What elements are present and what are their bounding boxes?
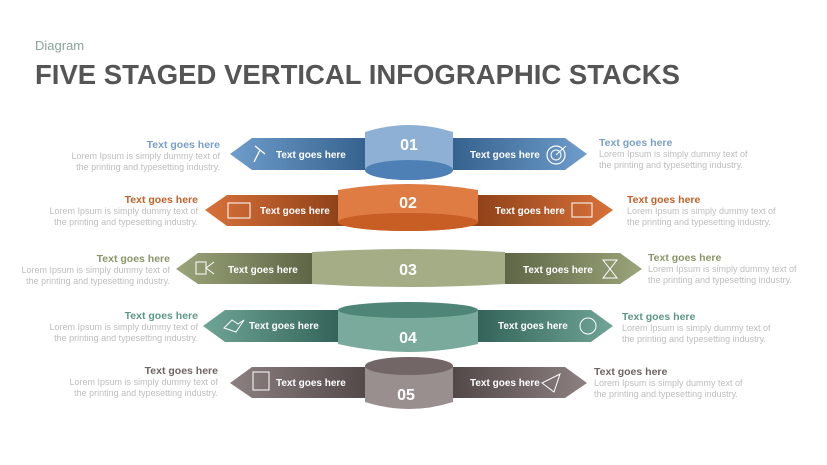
stage 5: Text goes here [470,378,540,389]
side text 1: the printing and typesetting industry. [76,162,220,172]
side text 2: Lorem Ipsum is simply dummy text of [627,206,776,216]
stage 5: Text goes here [276,378,346,389]
stage 3: 03 [399,262,417,279]
stage 2: 02 [399,195,417,212]
side text 1: Lorem Ipsum is simply dummy text of [599,149,748,159]
side text 1: Lorem Ipsum is simply dummy text of [71,151,220,161]
stage 4: 04 [399,330,417,347]
side text 5: the printing and typesetting industry. [74,388,218,398]
side text 1 [71,137,748,172]
side text 2: the printing and typesetting industry. [627,217,771,227]
side text 5: Text goes here [594,366,667,378]
stage 3: Text goes here [523,265,593,276]
side text 5: the printing and typesetting industry. [594,389,738,399]
side text 1: Text goes here [147,139,220,151]
stage 2: Text goes here [495,206,565,217]
side text 5: Lorem Ipsum is simply dummy text of [594,378,743,388]
stage 4: Text goes here [498,321,568,332]
side text 2: Lorem Ipsum is simply dummy text of [49,206,198,216]
stage 5: 05 [397,387,415,404]
side text 2: Text goes here [627,194,700,206]
side text 4: Lorem Ipsum is simply dummy text of [49,322,198,332]
side text 4: the printing and typesetting industry. [54,333,198,343]
side text 4: the printing and typesetting industry. [622,334,766,344]
side text 1: the printing and typesetting industry. [599,160,743,170]
side text 1: Text goes here [599,137,672,149]
side text 3 [21,252,797,286]
side text 2: Text goes here [125,194,198,206]
stage 5 [230,357,587,409]
stage 3: Text goes here [228,265,298,276]
stage 1: Text goes here [276,150,346,161]
side text 5: Text goes here [145,365,218,377]
stage 4 [203,302,613,352]
side text 3: Text goes here [97,253,170,265]
side text 3: the printing and typesetting industry. [648,275,792,285]
side text 3: the printing and typesetting industry. [26,276,170,286]
stage 1: Text goes here [470,150,540,161]
stage 1 [230,125,587,180]
side text 4 [49,310,771,344]
stage 4: Text goes here [249,321,319,332]
stage 3 [176,249,642,287]
side text 3: Lorem Ipsum is simply dummy text of [648,264,797,274]
stage 1: 01 [400,137,418,154]
stage 2 [205,184,613,231]
side text 4: Text goes here [622,311,695,323]
subtitle: Diagram [35,38,84,53]
side text 5 [69,365,743,399]
side text 4: Text goes here [125,310,198,322]
side text 2: the printing and typesetting industry. [54,217,198,227]
side text 3: Lorem Ipsum is simply dummy text of [21,265,170,275]
title: FIVE STAGED VERTICAL INFOGRAPHIC STACKS [35,59,680,90]
side text 2 [49,194,776,227]
stage 2: Text goes here [260,206,330,217]
side text 4: Lorem Ipsum is simply dummy text of [622,323,771,333]
side text 3: Text goes here [648,252,721,264]
side text 5: Lorem Ipsum is simply dummy text of [69,377,218,387]
